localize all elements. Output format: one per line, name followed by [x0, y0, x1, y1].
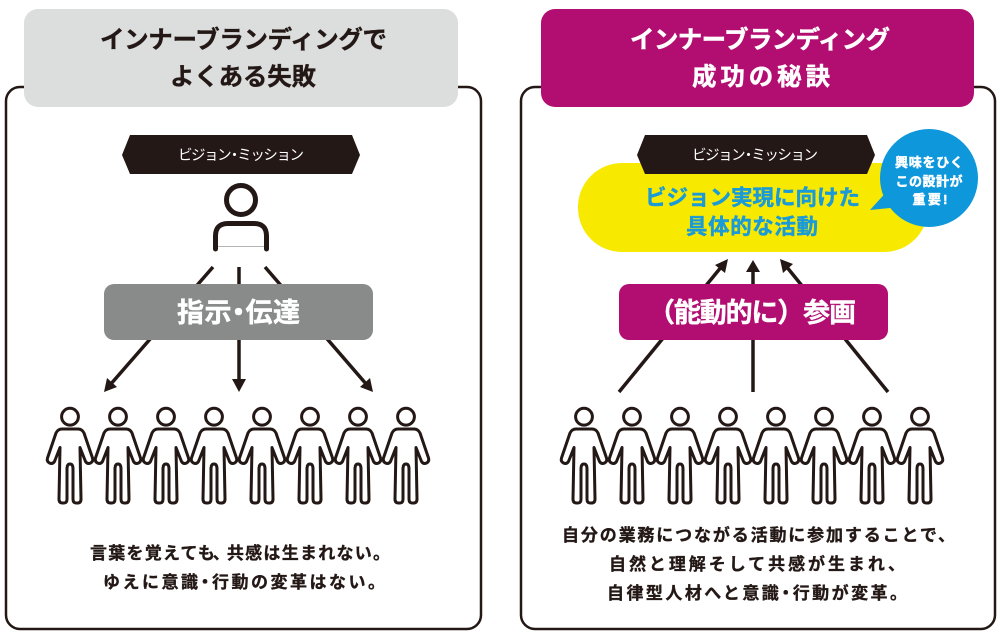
- text: success description: 自分の業務につながる活動に参加することで、: [562, 525, 955, 545]
- callout: design matters: [870, 129, 978, 227]
- heading: common failures: インナーブランディングで: [100, 25, 387, 54]
- panel frame: left: [6, 87, 481, 629]
- text: failure description: 言葉を覚えても、共感は生まれない。: [90, 543, 390, 563]
- box: active participation: （能動的に）参画: [648, 298, 856, 328]
- arrows: bottom-up participation: [619, 259, 888, 392]
- pill: concrete activities: [578, 163, 928, 252]
- text: success description: 自然と理解そして共感が生まれ、: [609, 554, 905, 574]
- box: instruction and communication: 指示・伝達: [177, 298, 300, 328]
- label: vision and mission: ビジョン・ミッション: [692, 147, 818, 164]
- label: vision and mission: [122, 135, 360, 174]
- text: failure description: [90, 543, 390, 592]
- pill: concrete activities: ビジョン実現に向けた: [645, 186, 860, 210]
- heading: keys to success: [541, 9, 974, 107]
- panel: keys to success: [521, 9, 995, 629]
- heading: keys to success: 成功の秘訣: [692, 63, 830, 91]
- heading: common failures: [24, 9, 458, 107]
- text: failure description: ゆえに意識・行動の変革はない。: [103, 573, 385, 592]
- icon: employees: [561, 408, 943, 503]
- text: success description: 自律型人材へと意識・行動が変革。: [607, 583, 907, 603]
- text: success description: [562, 525, 955, 603]
- heading: common failures: よくある失敗: [170, 63, 316, 91]
- icon: leader: [216, 186, 266, 249]
- heading: keys to success: インナーブランディング: [630, 25, 890, 54]
- icon: employees: [47, 408, 429, 503]
- panel frame: right: [521, 87, 995, 629]
- label: vision and mission: ビジョン・ミッション: [178, 147, 304, 164]
- callout: design matters: この設計が: [896, 174, 962, 189]
- arrows: top-down communication: [104, 267, 373, 392]
- callout: design matters: 興味をひく: [895, 155, 963, 170]
- box: instruction and communication: [104, 284, 373, 340]
- pill: concrete activities: 具体的な活動: [686, 215, 818, 239]
- label: vision and mission: [637, 135, 875, 174]
- box: active participation: [619, 284, 888, 340]
- callout: design matters: 重要!: [912, 192, 948, 207]
- panel: common failures: [6, 9, 481, 629]
